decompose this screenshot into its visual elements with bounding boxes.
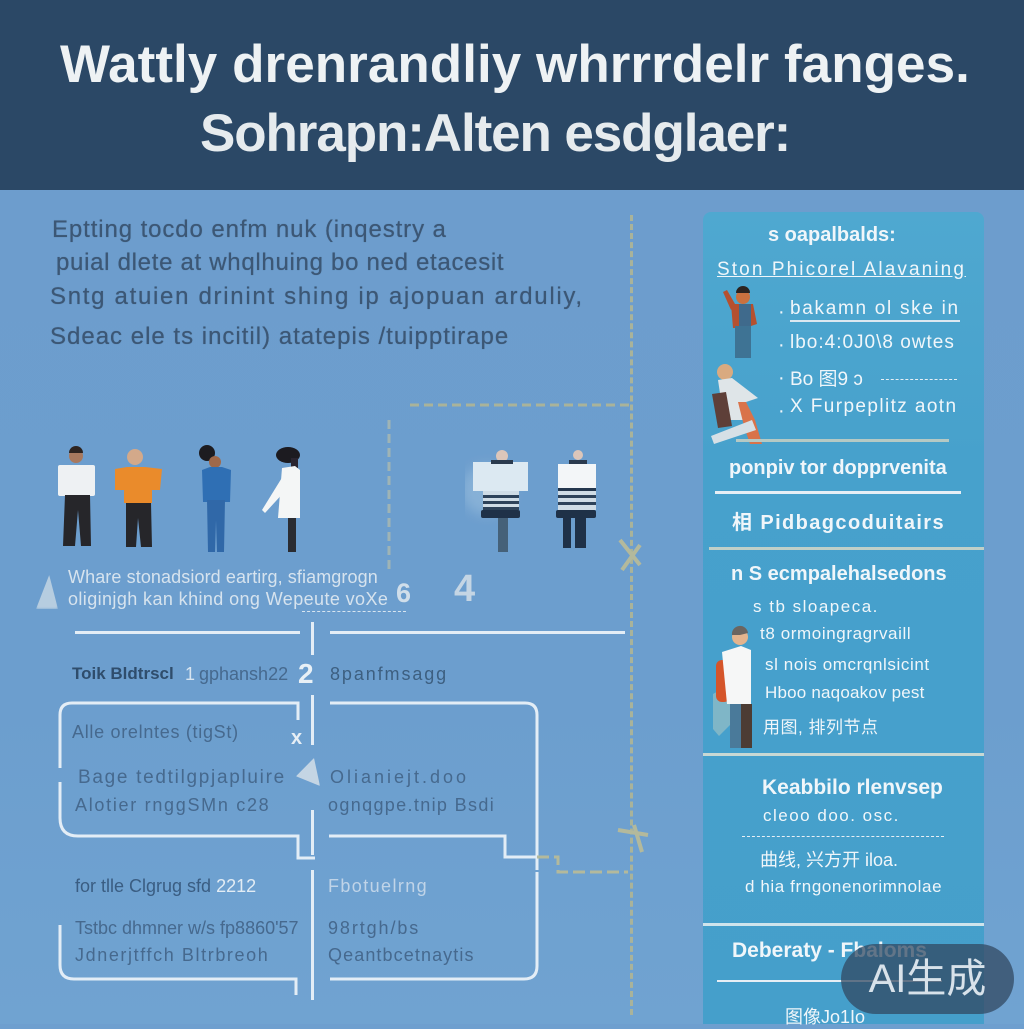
panel subheading: Ston Phicorel Alavaning — [717, 259, 966, 280]
title line 2: Sohrapn:Alten esdglaer: — [200, 104, 790, 163]
list bullets: · — [778, 400, 785, 422]
mid caption: oliginjgh kan khind ong Wepeute voXe — [68, 589, 388, 609]
section 2 text: 相 Pidbagcoduitairs — [732, 512, 945, 534]
table heading row: Toik Bldtrscl — [72, 664, 174, 683]
list bullets: · — [778, 334, 785, 356]
sidebar panel: Hboo naqoakov pest — [765, 683, 925, 702]
section 5 text: 图像Jo1Io — [785, 1007, 865, 1027]
list bullets: · — [778, 301, 785, 323]
icon: person with backpack — [713, 626, 752, 748]
dashed vertical divider — [630, 215, 633, 1015]
intro text block: puial dlete at whqlhuing bo ned etacesit — [56, 249, 504, 276]
machine 1 — [473, 450, 528, 552]
faded marker — [36, 575, 58, 609]
section 5 heading: Deberaty - Fbaloms — [732, 939, 927, 962]
dotted underline — [302, 611, 406, 612]
table heading row — [72, 658, 448, 689]
sidebar panel: sl nois omcrqnlsicint — [765, 655, 930, 674]
table heading row: 1 — [185, 664, 195, 684]
section 4 dashed rule — [742, 836, 944, 837]
small marker shape — [296, 758, 320, 786]
section 4 text lower: 曲线, 兴方开 iloa. — [760, 850, 898, 870]
upper box text: Olianiejt.doo — [330, 767, 469, 787]
machine icons — [465, 450, 596, 552]
lower box text: Tstbc dhmner w/s fp8860'57 — [75, 918, 299, 938]
lower box text — [75, 876, 475, 965]
people group — [58, 445, 300, 552]
list bullets: · — [778, 367, 785, 389]
sidebar panel — [703, 212, 984, 1024]
title banner — [0, 0, 1024, 190]
list item 3: Bo 图9 ɔ — [790, 369, 863, 390]
section 4 heading: Keabbilo rlenvsep — [762, 776, 943, 799]
list item 1: bakamn ol ske in — [790, 298, 960, 319]
upper box text: Bage tedtilgpjapluire — [78, 767, 286, 788]
title line 1: Wattly drenrandliy whrrrdelr fanges. — [60, 35, 970, 94]
section 2 heading: ponpiv tor dopprvenita — [729, 457, 947, 479]
list bullets — [778, 301, 785, 422]
section 3 rule — [709, 547, 984, 550]
section 4 text last: d hia frngonenorimnolae — [745, 877, 942, 896]
section 5 rule — [703, 923, 984, 926]
symbol 4: 4 — [454, 568, 475, 610]
lower box text: for tlle Clgrug sfd 2212 — [75, 876, 256, 896]
table heading row: 2 — [298, 658, 314, 689]
dashed connector — [388, 404, 629, 569]
person 3 — [199, 445, 231, 552]
section 3 list: t8 ormoingragrvaill — [760, 624, 911, 643]
person 2 — [115, 449, 162, 547]
upper box text: Alotier rnggSMn c28 — [75, 795, 270, 815]
intro text block: Sntg atuien drinint shing ip ajopuan arduliy, — [50, 283, 584, 310]
upper box text: ognqgpe.tnip Bsdi — [328, 795, 495, 815]
list item 2: lbo:4:0J0\8 owtes — [790, 332, 955, 353]
section 3 heading: n S ecmpalehalsedons — [731, 563, 947, 585]
upper box text: Alle orelntes (tigSt) — [72, 722, 239, 742]
section 3 sub: s tb sloapeca. — [753, 597, 879, 616]
table heading row: 8panfmsagg — [330, 664, 448, 684]
symbol 6: 6 — [396, 578, 411, 608]
machine glow — [461, 465, 513, 515]
lower box text: 98rtgh/bs — [328, 918, 420, 938]
panel heading: s oapalbalds: — [768, 224, 896, 246]
section 4 text: cleoo doo. osc. — [763, 806, 900, 825]
intro text block: Sdeac ele ts incitil) atatepis /tuipptirape — [50, 323, 509, 350]
person 1 — [58, 446, 95, 546]
table heading row: gphansh22 — [199, 664, 288, 684]
intro text block — [50, 216, 584, 350]
list item 3 dash — [881, 379, 957, 380]
icon: person seated — [711, 364, 762, 444]
small marker x: x — [291, 727, 302, 749]
AI badge: AI生成 — [869, 957, 986, 1001]
section 2 rule — [715, 491, 961, 494]
section 5 rule — [717, 980, 942, 982]
sidebar panel: 用图, 排列节点 — [763, 718, 878, 737]
person 4 — [262, 447, 300, 552]
list item 4: X Furpeplitz aotn — [790, 396, 957, 417]
lower box text: Fbotuelrng — [328, 876, 428, 896]
lower box text: Jdnerjtffch Bltrbreoh — [75, 945, 269, 965]
AI badge — [841, 944, 1014, 1014]
mid caption: Whare stonadsiord eartirg, sfiamgrogn — [68, 567, 378, 587]
lower box text: Qeantbcetnaytis — [328, 945, 475, 965]
icon: person standing — [723, 286, 757, 358]
upper box text — [72, 722, 495, 815]
mid caption — [68, 567, 388, 609]
section 1 rule — [736, 439, 949, 442]
intro text block: Eptting tocdo enfm nuk (inqestry a — [52, 216, 447, 243]
machine 2 — [556, 450, 596, 548]
section 4 rule — [703, 753, 984, 756]
